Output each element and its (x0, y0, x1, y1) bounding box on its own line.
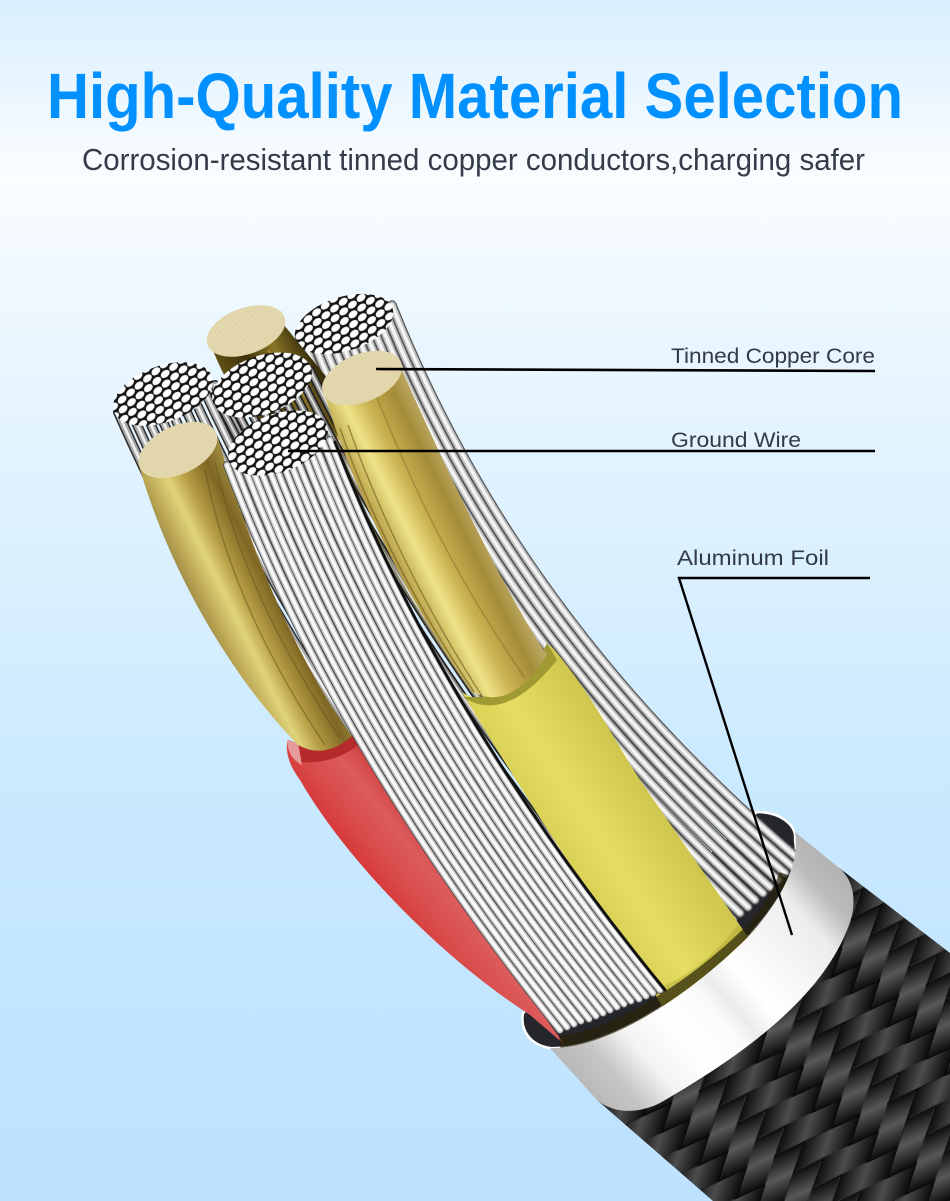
back gold core (200, 295, 360, 470)
red insulated wire (287, 735, 565, 1045)
label: aluminum foil (677, 547, 870, 935)
label: tinned copper core: Tinned Copper Core (671, 345, 875, 368)
yellow insulated wire (462, 643, 750, 1010)
aluminum foil ring (550, 832, 853, 1111)
right gold core (314, 340, 547, 697)
back left silver bundle (105, 350, 500, 900)
ring opening interior (522, 812, 796, 1048)
label: aluminum foil: Aluminum Foil (677, 547, 829, 570)
dark strand roots inside ring (560, 875, 788, 1045)
back right silver bundle (287, 283, 800, 940)
cable illustration (105, 283, 950, 1201)
braided black sleeve (597, 867, 950, 1201)
subtitle: Corrosion-resistant tinned copper conductors,charging safer (82, 142, 865, 177)
label: ground wire: Ground Wire (671, 429, 801, 452)
front silver bundle (ground wire) (219, 398, 665, 1030)
middle silver bundle (203, 340, 620, 900)
left gold core (130, 410, 352, 751)
